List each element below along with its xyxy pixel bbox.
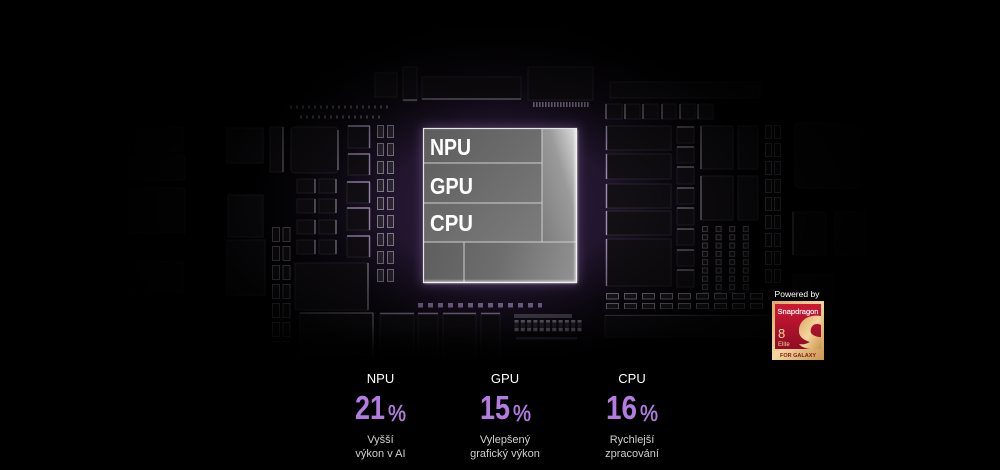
chip label: CPU: CPU (430, 210, 473, 236)
powered by: Powered by (775, 289, 820, 299)
stat: GPU: 15 (480, 389, 510, 426)
chip body (423, 128, 577, 283)
left components: squares column (347, 126, 370, 257)
stat: GPU: % (513, 400, 531, 426)
right components: medium column (677, 127, 694, 287)
left components: pin pairs (272, 125, 394, 342)
right components: tiny pairs and long block (605, 293, 770, 337)
right components: tall rectangles (701, 125, 782, 293)
badge flame (799, 316, 821, 349)
stat: CPU (605, 371, 659, 460)
chip label: NPU: NPU (430, 134, 471, 160)
chip (421, 126, 579, 285)
bottom components (380, 303, 583, 360)
stat: NPU: výkon v AI (355, 448, 406, 460)
stat: GPU: Vylepšený (480, 434, 531, 446)
stat: GPU: GPU (491, 371, 519, 386)
stat: CPU: Rychlejší (610, 434, 654, 446)
chip dividers (424, 129, 576, 282)
stat: NPU: % (388, 400, 406, 426)
badge number: 8 (778, 326, 785, 341)
purple glow (100, 0, 900, 420)
badge name: Snapdragon (778, 307, 818, 316)
badge frame (772, 301, 824, 360)
chip label: GPU: GPU (430, 173, 473, 199)
stat: NPU: 21 (355, 389, 385, 426)
stat: CPU: % (640, 400, 658, 426)
circuit board (128, 67, 865, 360)
badge elite: Elite (778, 342, 790, 348)
right components: top row (606, 82, 760, 119)
Snapdragon badge (772, 289, 824, 360)
stat: NPU: Vyšší (367, 434, 394, 446)
chip border (424, 128, 576, 282)
stat: CPU: 16 (606, 389, 637, 426)
stat: NPU: NPU (367, 371, 394, 386)
top components (375, 67, 593, 107)
badge footer: FOR GALAXY (780, 353, 816, 359)
badge red panel (775, 304, 821, 349)
right components: far blocks (793, 123, 865, 315)
stat: GPU: grafický výkon (470, 448, 540, 460)
stat: GPU (470, 371, 540, 460)
stat: NPU (355, 371, 406, 460)
left components: large blocks (128, 127, 373, 360)
right components: large blocks (606, 126, 671, 286)
chip glow (421, 126, 579, 285)
left components: small grid (297, 179, 336, 254)
chip cells (424, 129, 576, 282)
left components: dotted rows (290, 107, 392, 117)
stat: CPU: CPU (618, 371, 646, 386)
stat: CPU: zpracování (605, 448, 659, 460)
bottom fade (0, 325, 1000, 363)
